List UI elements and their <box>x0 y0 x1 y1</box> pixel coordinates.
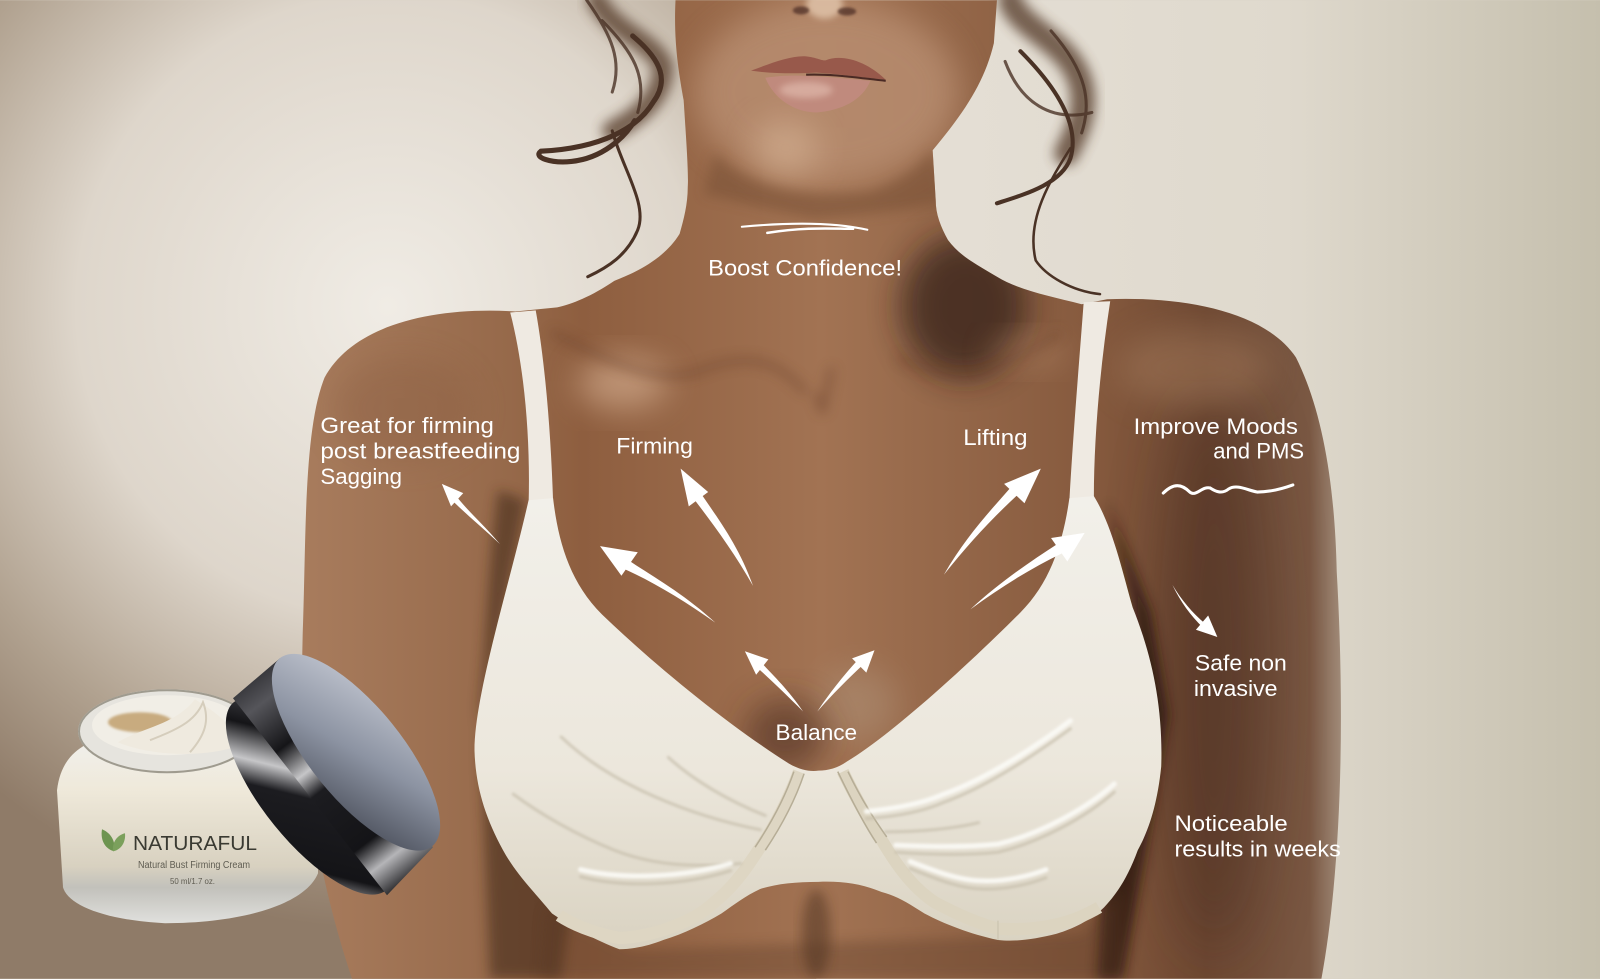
arrow: safe <box>1172 585 1217 637</box>
arrow: balance left <box>745 651 803 711</box>
label: firming post breastfeeding: Sagging <box>320 464 402 489</box>
label: safe non invasive: invasive <box>1194 676 1278 701</box>
label: firming post breastfeeding: Great for firming <box>320 413 494 438</box>
jar lid <box>198 629 468 919</box>
hair strands <box>539 0 1100 294</box>
figure: skin silhouette <box>302 0 1341 979</box>
arrow: firming upper <box>681 469 753 586</box>
jar opening and cream <box>78 689 256 773</box>
label: safe non invasive: Safe non <box>1195 651 1287 676</box>
jar label <box>102 829 257 886</box>
product: cream jar <box>57 629 468 923</box>
face: nose, mouth and chin <box>751 0 886 112</box>
underwire bands <box>559 772 1099 940</box>
fabric folds <box>513 721 1114 889</box>
arrow: lifting lower <box>970 533 1085 609</box>
jar label: NATURAFUL <box>133 833 257 855</box>
hair behind the neck <box>597 0 1083 153</box>
arrow: sagging <box>442 484 500 544</box>
jar label: 50 ml/1.7 oz. <box>170 877 215 886</box>
label: noticeable results: results in weeks <box>1174 836 1341 861</box>
label: boost confidence: Boost Confidence! <box>708 256 902 281</box>
label: improve moods: and PMS <box>1213 438 1304 463</box>
arrow: lifting upper <box>944 469 1041 575</box>
arrow: balance right <box>817 650 874 711</box>
jar label: Natural Bust Firming Cream <box>138 860 250 871</box>
label: noticeable results: Noticeable <box>1174 811 1288 836</box>
garment: straps and cups <box>474 301 1161 949</box>
label: lifting: Lifting <box>963 425 1028 450</box>
label: firming: Firming <box>616 433 693 458</box>
jar body <box>57 745 318 923</box>
label: balance: Balance <box>776 720 857 745</box>
label: improve moods: Improve Moods <box>1134 414 1298 439</box>
scribble underline: confidence <box>742 224 867 233</box>
label: firming post breastfeeding: post breastfeeding <box>320 438 520 463</box>
arrow: firming lower <box>600 546 715 623</box>
squiggle underline: moods <box>1163 485 1293 493</box>
